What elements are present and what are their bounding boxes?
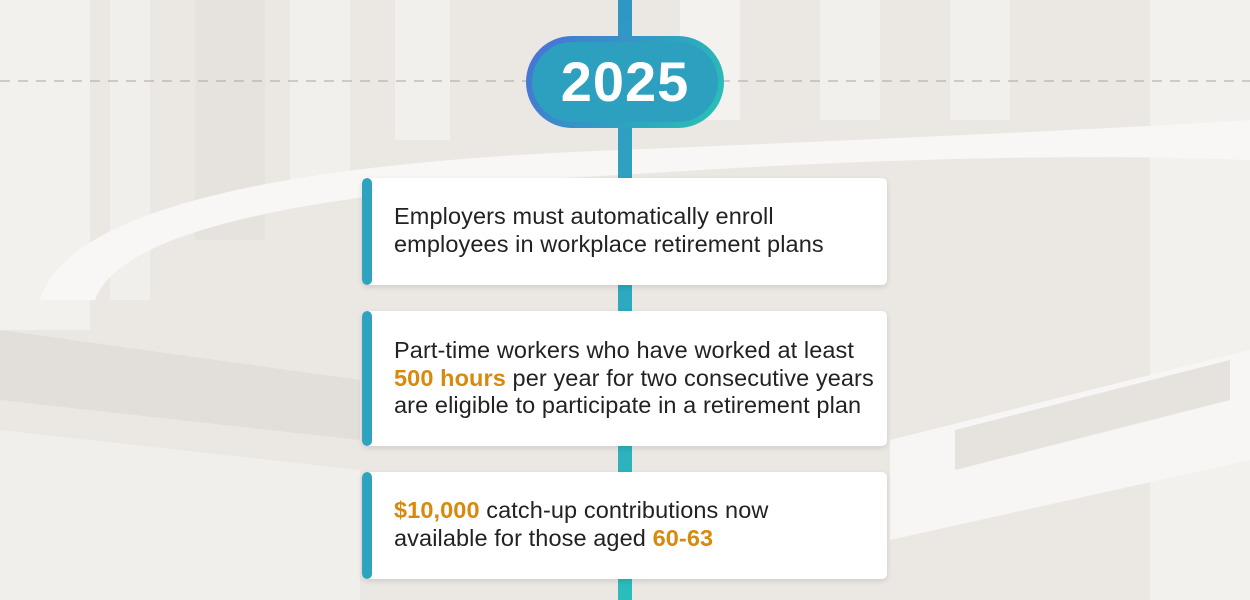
card: part-time workers: 500 hours per year for two consecutive years xyxy=(394,364,874,390)
card: part-time workers: are eligible to participate in a retirement plan xyxy=(394,392,861,418)
card: catch-up contributions xyxy=(362,472,887,579)
card: catch-up contributions: available for those aged 60-63 xyxy=(394,524,713,550)
timeline line xyxy=(618,0,632,600)
year pill: 2025 xyxy=(526,36,724,128)
card: part-time workers xyxy=(362,311,887,446)
card: part-time workers: Part-time workers who have worked at least xyxy=(394,337,854,363)
card: auto enrollment: employees in workplace retirement plans xyxy=(394,230,824,256)
year pill: 2025: 2025 xyxy=(561,50,689,113)
card: auto enrollment: Employers must automatically enroll xyxy=(394,203,774,229)
card: catch-up contributions: $10,000 catch-up contributions now xyxy=(394,497,768,523)
card: auto enrollment xyxy=(362,178,887,285)
